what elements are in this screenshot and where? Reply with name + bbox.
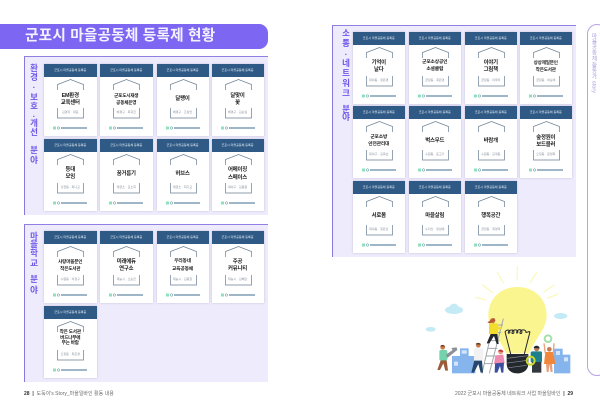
card: social club: 군포시 마을공동체 등록증 — [419, 36, 451, 40]
card: flower: 군포시 마을공동체 등록증 — [221, 68, 254, 72]
card: storybook: 그림책 — [484, 67, 498, 73]
card: together: 군포시 마을공동체 등록증 — [363, 184, 395, 188]
heading: village school: 마 — [30, 231, 38, 241]
card: jugong — [212, 230, 264, 302]
icon: person with wrench — [437, 345, 457, 371]
card: our town: 교육공동체 — [172, 267, 193, 272]
card: pinwheel: 군포시 마을공동체 등록증 — [475, 110, 507, 114]
card: dream: 군포시 마을공동체 등록증 — [110, 142, 142, 146]
card: jugong: 군포시 마을공동체 등록증 — [221, 234, 254, 238]
side tab — [587, 24, 600, 376]
card: willow: 작은 도서관 — [60, 329, 81, 334]
heading: communication network: 크 — [342, 88, 350, 98]
card: safety — [352, 106, 405, 178]
card: jugong: 커뮤니티 — [228, 266, 247, 272]
icon: clouds — [426, 304, 567, 332]
heading: communication network: 소 — [342, 28, 350, 38]
card: memory: 군포시 마을공동체 등록증 — [363, 36, 395, 40]
card: our town: 재능시 · 김용권 — [173, 276, 192, 280]
card: village life — [408, 180, 461, 252]
card: urban: 배경구 · 최희진 — [117, 110, 136, 114]
card: urban: 공동체운영 — [116, 100, 136, 104]
heading: environment: 야 — [30, 155, 38, 165]
card: EM: 군포시 마을공동체 등록증 — [54, 68, 86, 72]
card: willow — [44, 306, 96, 378]
card: social club: 군포소상공인 — [422, 60, 447, 65]
card: together: 대야동 · 정은선 — [369, 226, 388, 230]
heading: communication network: 통 — [342, 38, 350, 48]
card: bucks — [408, 106, 461, 178]
card: snail — [156, 64, 208, 136]
card: library: 군포시 마을공동체 등록증 — [54, 234, 86, 238]
card: our town — [156, 230, 208, 302]
illustration: light bulb and people — [426, 266, 570, 374]
heading: environment: 호 — [30, 101, 38, 111]
card: small library — [520, 32, 572, 104]
heading: communication network: · — [345, 49, 347, 59]
card: willow: 부는 바람 — [62, 340, 79, 345]
card: forest: 오정동 · 문영화 — [536, 152, 555, 156]
card: jugong: 재능시 · 김혜란 — [228, 276, 247, 280]
card: herbs — [156, 138, 208, 210]
card: social club — [408, 32, 461, 104]
footer: left page: 28 | 도둑이's Story_마을일바인 활동 내용 — [24, 391, 114, 397]
card: memory: 대야동 · 정은경 — [369, 78, 388, 82]
icon: person raising gear — [544, 335, 555, 372]
card: herbs: 재궁소 · 최기교 — [173, 184, 192, 188]
card: lighthouse — [44, 138, 96, 210]
heading: communication network: 트 — [342, 68, 350, 78]
icon: seated person — [494, 350, 505, 373]
card: lighthouse: 군포시 마을공동체 등록증 — [54, 142, 86, 146]
card: EM: 김경자 · 대표 — [62, 110, 78, 114]
panel: communication network — [332, 24, 576, 256]
heading: environment: 경 — [30, 72, 38, 82]
icon: bulb base — [507, 354, 528, 373]
card: flower — [212, 64, 264, 136]
card: future: 연구소 — [119, 266, 133, 272]
card: small library: 작은도서관 — [536, 67, 556, 72]
panel: environment — [24, 56, 268, 214]
card: urban — [100, 64, 152, 136]
icon: filament — [505, 330, 530, 354]
card: flower: 배경구 · 김순실 — [228, 110, 247, 114]
card: urban: 군포도시재생 — [114, 93, 138, 98]
heading: village school: 야 — [30, 285, 38, 295]
card: pinwheel — [464, 106, 517, 178]
card: library — [44, 230, 96, 302]
card: bucks: 수원동 · 윤고기 — [425, 152, 444, 156]
heading: environment — [30, 63, 38, 165]
side tab text: 마을공동체 활동가 story — [590, 33, 596, 93]
card: our town: 우리동네 — [174, 259, 191, 264]
card: herbs: 허브스 — [175, 171, 190, 177]
card: village life: 군포시 마을공동체 등록증 — [419, 184, 451, 188]
card: social club: 소셜클럽 — [426, 67, 443, 72]
card: amazing: 군포시 마을공동체 등록증 — [221, 142, 254, 146]
icon: left buildings — [452, 348, 475, 373]
card: village life: 마을살림 — [425, 213, 444, 219]
heading: village school: 학 — [30, 248, 38, 258]
card: small library: 금정동 · 하순애 — [536, 78, 555, 82]
heading: environment: 환 — [30, 63, 38, 73]
card: together — [352, 180, 405, 252]
card: forest: 군포시 마을공동체 등록증 — [530, 110, 562, 114]
card: snail: 군포시 마을공동체 등록증 — [166, 68, 199, 72]
card: willow: 버드나무에 — [60, 335, 80, 340]
icon: building windows — [454, 350, 568, 366]
heading: environment: 보 — [30, 92, 38, 102]
card: storybook: 금정동 · 이루리 — [481, 78, 500, 82]
card: amazing: 어메이징 — [228, 167, 247, 173]
card: snail: 달팽이 — [175, 96, 190, 102]
card: lighthouse: 모임 — [65, 174, 75, 180]
heading: village school — [30, 231, 38, 295]
heading: communication network: 워 — [342, 78, 350, 88]
card: memory: 기억이 — [372, 60, 386, 66]
card: village life: 수리산 · 유성애 — [425, 226, 444, 230]
heading: communication network — [342, 28, 350, 122]
title bar — [0, 24, 268, 49]
card: happy space — [464, 180, 517, 252]
card: happy space: 금정동 · 최영미 — [481, 226, 500, 230]
card: safety: 대야구 · 김옥남 — [369, 152, 388, 156]
card: willow: 오정동 · 최은경 — [61, 352, 80, 356]
card: dream — [100, 138, 152, 210]
heading: village school: 을 — [30, 239, 38, 249]
card: our town: 군포시 마을공동체 등록증 — [166, 234, 199, 238]
heading: environment: · — [33, 111, 35, 121]
card: flower: 달맞이 — [230, 93, 245, 99]
card: willow: 군포시 마을공동체 등록증 — [54, 310, 86, 314]
heading: village school: 교 — [30, 258, 38, 268]
heading: environment: 분 — [30, 145, 38, 155]
card: future — [100, 230, 152, 302]
card: happy space: 행복공간 — [481, 213, 500, 219]
card: jugong: 주공 — [233, 259, 242, 265]
card: amazing: 스페이스 — [228, 175, 247, 181]
card: amazing — [212, 138, 264, 210]
icon: climbing person — [487, 318, 501, 344]
card: small library: 군포시 마을공동체 등록증 — [530, 36, 562, 40]
icon: person standing — [471, 343, 483, 373]
icon: person with gear — [527, 346, 542, 373]
card: storybook: 이야기 — [484, 60, 498, 66]
card: forest: 보드블러 — [536, 142, 555, 148]
card: lighthouse: 신현동 · 최나교 — [61, 184, 80, 188]
card: memory — [352, 32, 405, 104]
heading: communication network: 네 — [342, 58, 350, 68]
card: together: 서로봄 — [372, 213, 386, 219]
card: bucks: 벅스무드 — [425, 138, 444, 144]
card: memory: 날다 — [374, 67, 384, 73]
card: small library: 상상제일문인 — [534, 60, 558, 65]
icon: ladder — [482, 319, 503, 373]
heading: environment: 선 — [30, 127, 38, 137]
card: safety: 군포시 마을공동체 등록증 — [363, 110, 395, 114]
icon: bulb glass — [488, 287, 547, 353]
footer: right page: 2022 군포시 마을공동체 네트워크 사업 마을일바인 | 29 — [455, 391, 573, 397]
card: library: 수원동 · 이정구 — [61, 276, 80, 280]
card: snail: 배경구 · 조실언 — [173, 110, 192, 114]
card: future: 군포시 마을공동체 등록증 — [110, 234, 142, 238]
heading: environment: 개 — [30, 118, 38, 128]
card: herbs: 군포시 마을공동체 등록증 — [166, 142, 199, 146]
heading: communication network: 분 — [342, 104, 350, 114]
heading: communication network: 야 — [342, 112, 350, 122]
card: library: 사랑마을문인 — [58, 259, 82, 264]
card: EM — [44, 64, 96, 136]
icon: bulb rays — [476, 267, 558, 300]
card: pinwheel: 수원동 · 김계동 — [481, 152, 500, 156]
heading: environment: · — [33, 82, 35, 92]
card: storybook: 군포시 마을공동체 등록증 — [475, 36, 507, 40]
card: happy space: 군포시 마을공동체 등록증 — [475, 184, 507, 188]
card: forest: 숲정원이 — [536, 135, 555, 141]
card: EM: 교육센터 — [61, 100, 80, 106]
icon: base threads — [507, 356, 528, 368]
card: pinwheel: 바람개 — [484, 138, 498, 144]
card: dream: 재궁소 · 김소희 — [117, 184, 136, 188]
card: social club: 금정동 · 최은영 — [425, 78, 444, 82]
card: future: 재능시 · 소순진 — [117, 276, 136, 280]
card: future: 미래에듀 — [117, 259, 136, 265]
card: storybook — [464, 32, 517, 104]
card: library: 작은도서관 — [60, 266, 80, 271]
card: bucks: 군포시 마을공동체 등록증 — [419, 110, 451, 114]
panel: village school — [24, 224, 268, 382]
card: flower: 꽃 — [235, 100, 240, 106]
card: amazing: 대야구 · 김원원 — [228, 184, 247, 188]
card: safety: 군포소방 — [370, 135, 387, 140]
card: lighthouse: 등대 — [65, 167, 75, 173]
heading: village school: 분 — [30, 274, 38, 284]
card: forest — [520, 106, 572, 178]
title text: 군포시 마을공동체 등록제 현황 — [25, 28, 215, 44]
card: safety: 안전관리대 — [368, 142, 389, 146]
icon: right buildings — [554, 349, 570, 373]
card: urban: 군포시 마을공동체 등록증 — [110, 68, 142, 72]
card: EM: EM환경 — [62, 93, 79, 99]
card: dream: 꿈거름기 — [117, 171, 136, 177]
